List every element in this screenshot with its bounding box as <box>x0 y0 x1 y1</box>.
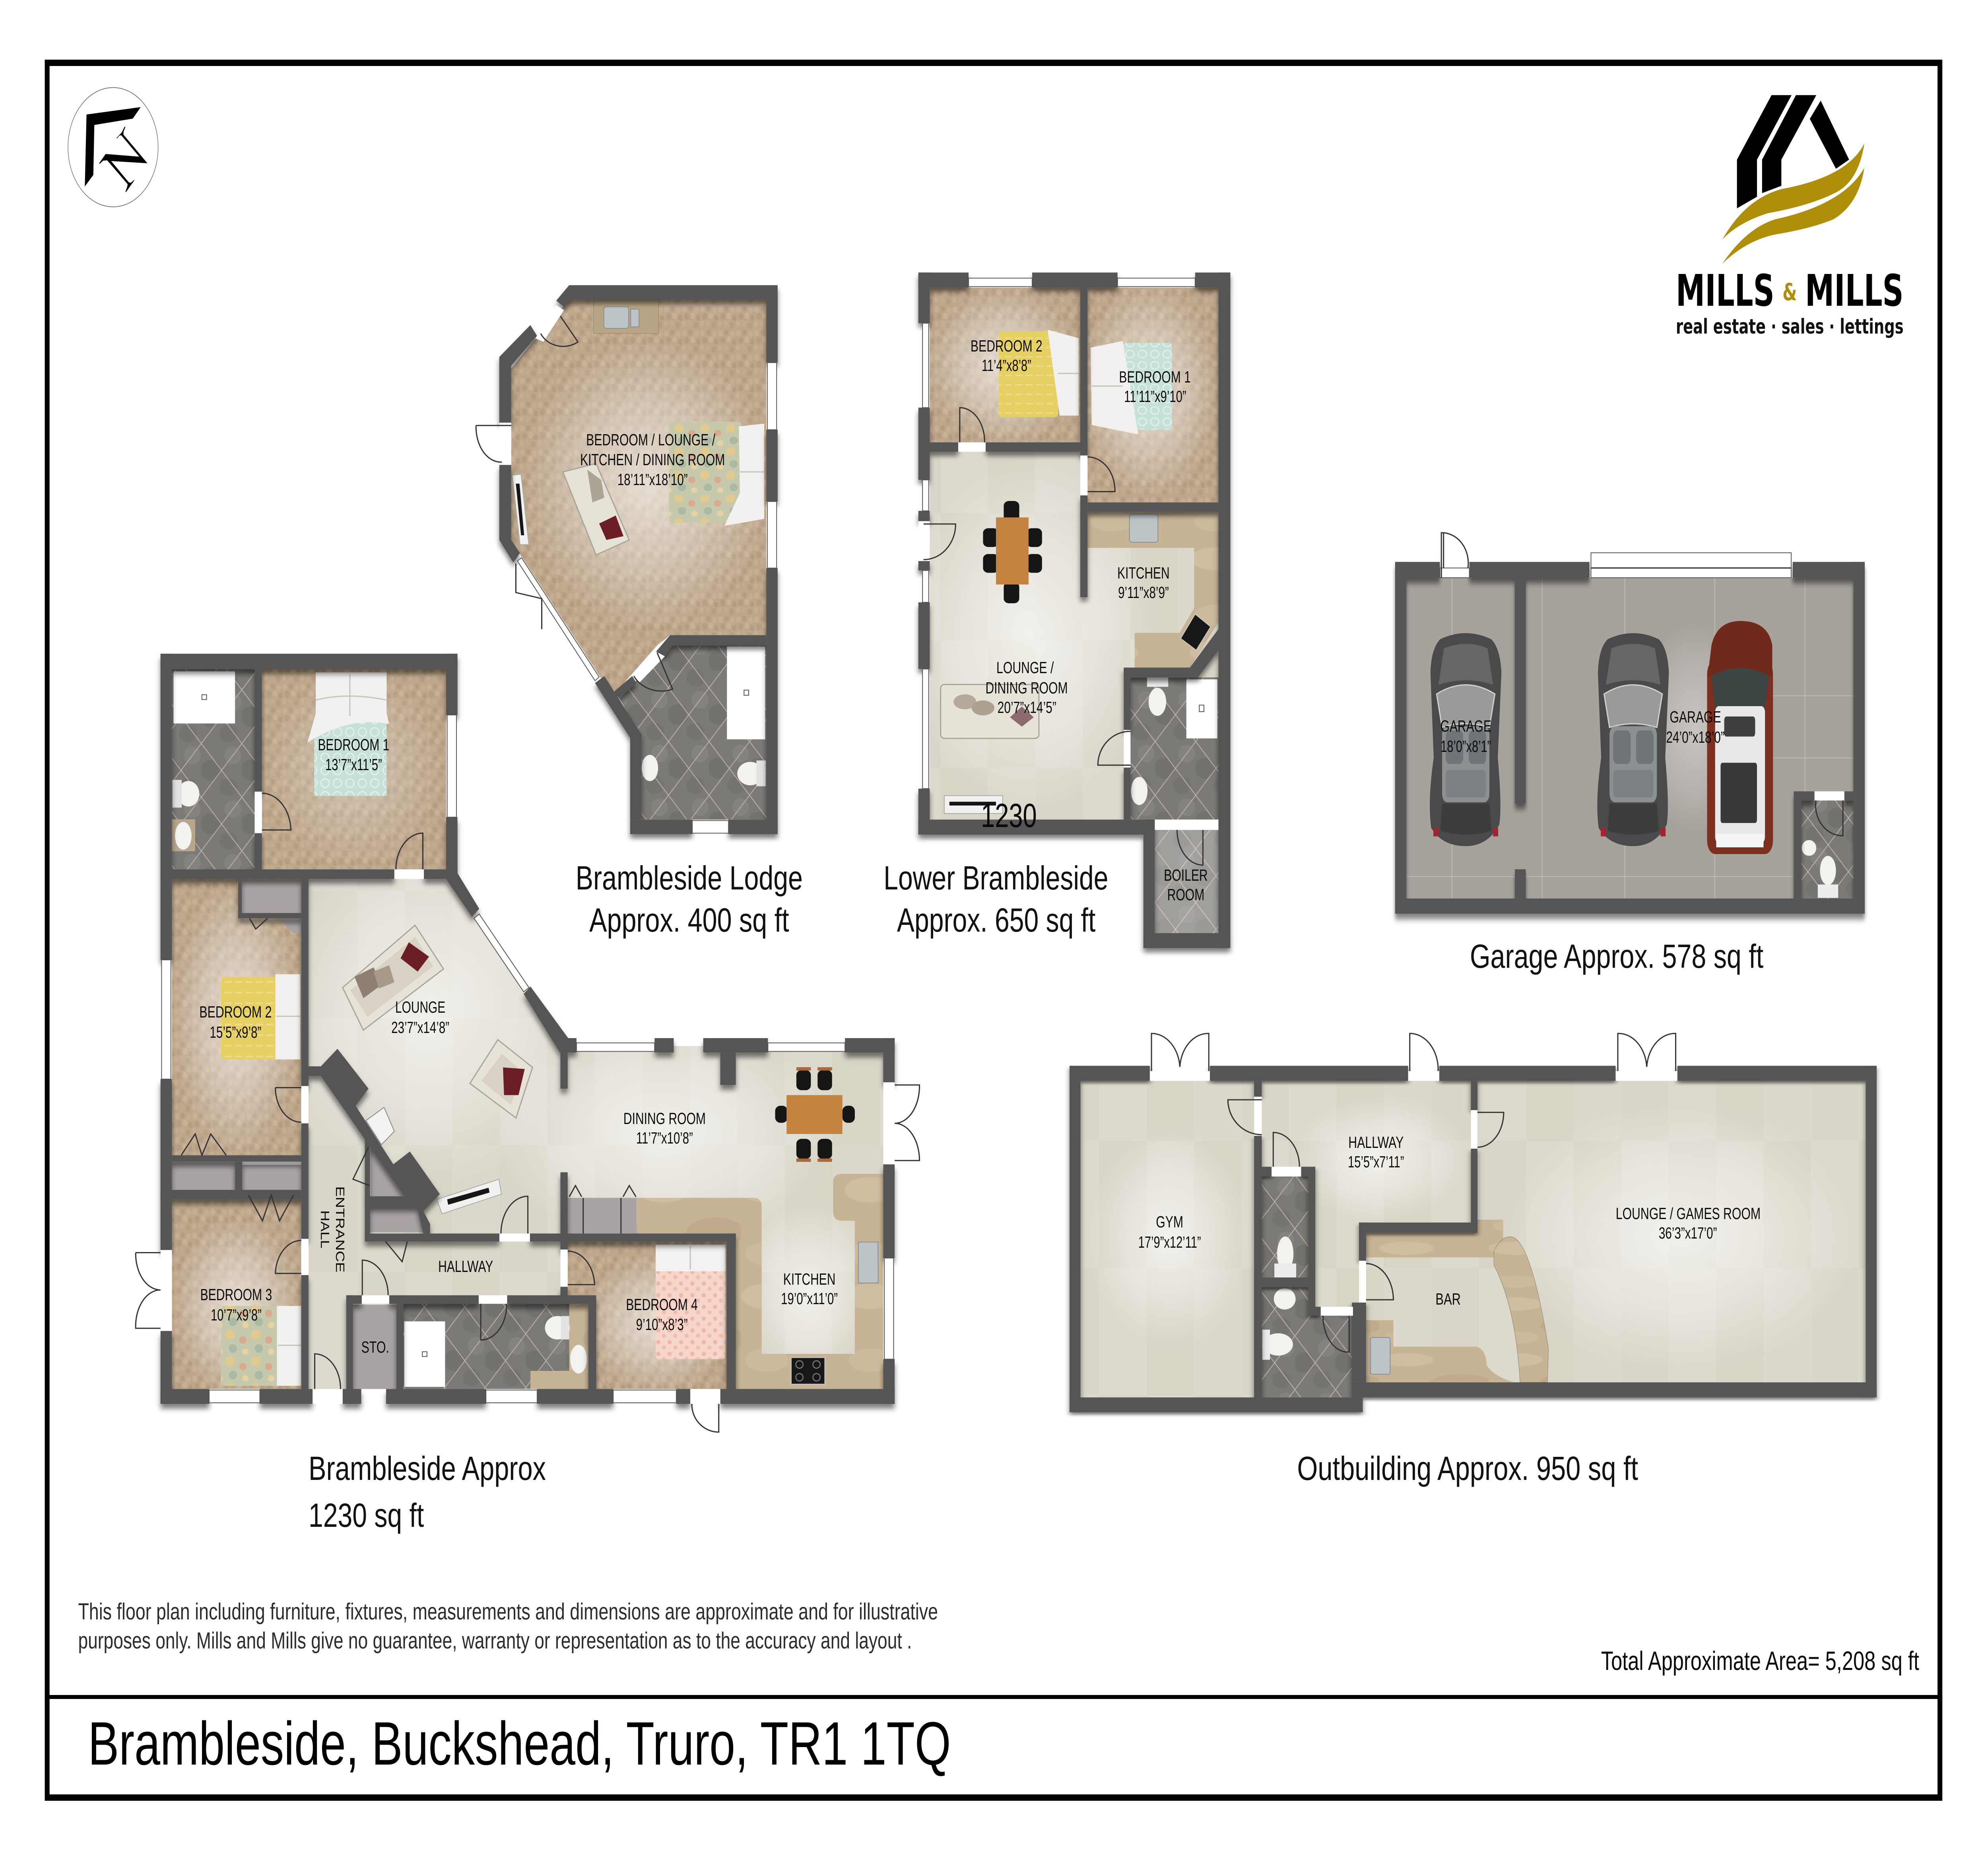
label: bedroom 1: 13’7”x11’5” <box>325 755 382 774</box>
heading: Lower Brambleside: Lower Brambleside <box>883 859 1109 897</box>
label: lower bedroom 1: BEDROOM 1 <box>1119 368 1191 386</box>
label: garage one <box>1440 717 1491 755</box>
doors <box>918 408 1218 865</box>
label: bedroom 2: 15’5”x9’8” <box>210 1023 261 1041</box>
room labels: Outbuilding <box>1138 1133 1761 1308</box>
label: lower bedroom 2: BEDROOM 2 <box>971 337 1043 355</box>
label: kitchen: 19’0”x11’0” <box>781 1289 838 1308</box>
windows <box>922 278 1195 788</box>
kitchen worktop <box>637 1174 883 1389</box>
armchair <box>470 1040 532 1118</box>
car: centre convertible <box>1597 633 1669 846</box>
plan: Brambleside main house <box>136 654 920 1432</box>
dining table and chairs <box>775 1067 855 1162</box>
heading: Lower Brambleside <box>883 859 1109 939</box>
car: red and white SUV <box>1707 621 1773 854</box>
sofa <box>343 925 443 1030</box>
doors <box>476 305 673 691</box>
disclaimer <box>78 1598 938 1653</box>
disclaimer: purposes only. Mills and Mills give no guarantee, warranty or representation as to the accuracy and layout . <box>78 1627 912 1653</box>
label: entrance hall <box>318 1186 347 1272</box>
label: games room: 36’3”x17’0” <box>1659 1224 1717 1242</box>
label: outbuilding hallway: HALLWAY <box>1348 1133 1404 1151</box>
label: bar: BAR <box>1435 1290 1461 1308</box>
label: gym: GYM <box>1156 1213 1183 1231</box>
sink unit <box>366 1107 394 1145</box>
label: garage two: GARAGE <box>1670 708 1721 726</box>
bathroom counter <box>530 1304 588 1389</box>
bed: bedroom 4 <box>656 1245 726 1359</box>
label: lower lounge: 20’7”x14’5” <box>998 698 1056 716</box>
label: lower kitchen: 9’11”x8’9” <box>1118 583 1169 602</box>
dining table and chairs <box>983 501 1042 603</box>
logo tagline: real estate · sales · lettings <box>1676 314 1904 338</box>
label: garage one: 18’0”x8’1” <box>1441 737 1491 755</box>
label: bedroom 4 <box>626 1295 698 1334</box>
stray number: 1230 <box>981 797 1037 834</box>
label: games room: LOUNGE / GAMES ROOM <box>1616 1204 1761 1223</box>
heading: Brambleside Lodge: Brambleside Lodge <box>576 859 803 897</box>
label: bedroom 4: BEDROOM 4 <box>626 1295 698 1314</box>
fixtures: bathroom one <box>172 671 235 851</box>
label: storage: STO. <box>361 1338 389 1356</box>
car: left convertible <box>1430 633 1501 846</box>
logo: Mills and Mills <box>1676 95 1904 338</box>
label: garage two <box>1666 708 1725 746</box>
label: bedroom 2: BEDROOM 2 <box>199 1003 272 1021</box>
label: lower bedroom 1: 11’11”x9’10” <box>1124 387 1186 406</box>
total area: Total Approximate Area= 5,208 sq ft <box>1601 1646 1919 1676</box>
fireplace <box>512 474 529 545</box>
label: boiler room: BOILER <box>1164 866 1208 884</box>
walls <box>918 272 1230 948</box>
logo ampersand: & <box>1782 278 1797 306</box>
label: hallway: HALLWAY <box>438 1257 493 1276</box>
walls <box>161 654 895 1404</box>
windows <box>161 715 894 1403</box>
label: bedroom 2 <box>199 1003 272 1041</box>
label: lower bedroom 2 <box>971 337 1043 375</box>
label: entrance hall: ENTRANCE <box>333 1186 347 1273</box>
label: lounge: 23’7”x14’8” <box>391 1018 449 1037</box>
label: lower kitchen: KITCHEN <box>1117 564 1170 582</box>
sofa <box>563 464 629 555</box>
room labels: Lodge: BEDROOM / LOUNGE / <box>586 431 716 449</box>
heading: Garage: Garage Approx. 578 sq ft <box>1470 938 1763 975</box>
label: gym <box>1138 1213 1201 1251</box>
label: kitchen <box>781 1270 838 1308</box>
heading: Brambleside Lodge: Approx. 400 sq ft <box>589 901 789 939</box>
disclaimer: This floor plan including furniture, fixtures, measurements and dimensions are approximate and for illustrative <box>78 1598 938 1624</box>
label: lounge <box>391 998 449 1037</box>
plan: Brambleside Lodge <box>476 285 778 834</box>
heading: Brambleside <box>309 1450 546 1534</box>
walls <box>1395 562 1865 914</box>
concrete floor <box>1406 578 1854 899</box>
label: lower bedroom 2: 11’4”x8’8” <box>982 356 1031 375</box>
doors <box>136 792 920 1432</box>
room labels: Garage <box>1440 708 1725 755</box>
heading: Brambleside Lodge <box>576 859 803 939</box>
bed: lower bedroom 2 <box>998 330 1079 417</box>
label: lower kitchen <box>1117 564 1170 602</box>
bed: lower bedroom 1 <box>1091 341 1172 434</box>
label: bedroom 3 <box>200 1285 272 1324</box>
bed: bedroom 3 <box>221 1306 301 1386</box>
bar worktops <box>1366 1220 1549 1382</box>
label: lower lounge: DINING ROOM <box>985 679 1068 697</box>
kitchenette <box>594 300 659 334</box>
kitchen appliances <box>1130 514 1211 650</box>
doors <box>1150 1033 1677 1352</box>
room labels: Lodge: KITCHEN / DINING ROOM <box>580 450 725 469</box>
fireplace <box>437 1179 501 1214</box>
storage cupboards <box>172 880 637 1389</box>
kitchen appliances <box>791 1242 878 1384</box>
room labels: Lodge <box>580 431 725 489</box>
label: bedroom 3: 10’7”x9’8” <box>211 1306 262 1324</box>
bed: bedroom 1 <box>307 672 389 796</box>
label: lower bedroom 1 <box>1119 368 1191 406</box>
plan: Garage <box>1395 533 1865 914</box>
sofa <box>941 684 1039 738</box>
label: outbuilding hallway: 15’5”x7’11” <box>1348 1153 1404 1171</box>
bed: bedroom 2 <box>221 974 300 1060</box>
walls <box>499 285 778 834</box>
bathroom fixtures <box>1131 678 1217 805</box>
garage door and window <box>1440 533 1844 836</box>
label: lower lounge: LOUNGE / <box>996 658 1054 677</box>
WC fixtures <box>1262 1237 1296 1360</box>
walls <box>1070 1066 1877 1412</box>
label: garage one: GARAGE <box>1440 717 1491 735</box>
label: dining room: DINING ROOM <box>623 1109 706 1128</box>
label: lower lounge <box>985 658 1068 716</box>
label: boiler room: ROOM <box>1167 885 1204 904</box>
label: gym: 17’9”x12’11” <box>1138 1233 1201 1251</box>
WC fixtures <box>1802 840 1838 898</box>
fireplace <box>944 796 1003 814</box>
heading: Brambleside: 1230 sq ft <box>309 1497 424 1534</box>
label: lounge: LOUNGE <box>395 998 445 1016</box>
logo wordmark left: MILLS <box>1676 265 1774 316</box>
room labels: Lodge: 18’11”x18’10” <box>617 470 688 489</box>
label: dining room: 11’7”x10’8” <box>636 1129 693 1147</box>
heading: Lower Brambleside: Approx. 650 sq ft <box>897 901 1096 939</box>
bathroom fixtures <box>642 647 766 786</box>
icon: north compass <box>68 87 158 207</box>
heading: Brambleside: Brambleside Approx <box>309 1450 546 1487</box>
floors <box>172 668 883 1398</box>
label: boiler room <box>1164 866 1208 904</box>
icon: gold swoosh <box>1722 143 1864 264</box>
label: garage two: 24’0”x18’0” <box>1666 728 1725 746</box>
bar sink <box>1371 1338 1390 1374</box>
fixtures: bathroom two <box>404 1316 587 1387</box>
icon: house roof <box>1737 95 1849 208</box>
label: games room <box>1616 1204 1761 1242</box>
label: bedroom 3: BEDROOM 3 <box>200 1285 272 1304</box>
floors <box>900 282 1218 933</box>
room labels: Lower Brambleside <box>971 337 1208 904</box>
plan: Lower Brambleside <box>900 272 1230 948</box>
label: bedroom 1: BEDROOM 1 <box>318 736 389 754</box>
room labels: Brambleside <box>199 736 838 1356</box>
title: address: Brambleside, Buckshead, Truro, TR1 1TQ <box>88 1709 951 1778</box>
bed <box>669 422 764 526</box>
windows <box>517 363 777 833</box>
plan: Outbuilding <box>1070 1033 1877 1412</box>
label: dining room <box>623 1109 706 1147</box>
logo wordmark right: MILLS <box>1805 265 1904 316</box>
heading: Outbuilding: Outbuilding Approx. 950 sq ft <box>1297 1450 1638 1487</box>
label: bedroom 1 <box>318 736 389 774</box>
kitchen worktop <box>1087 512 1218 668</box>
label: entrance hall: HALL <box>318 1210 332 1248</box>
label: outbuilding hallway <box>1348 1133 1404 1171</box>
floors <box>511 300 771 819</box>
label: kitchen: KITCHEN <box>783 1270 835 1288</box>
floors <box>1080 1081 1866 1398</box>
label: bedroom 4: 9’10”x8’3” <box>636 1315 688 1334</box>
